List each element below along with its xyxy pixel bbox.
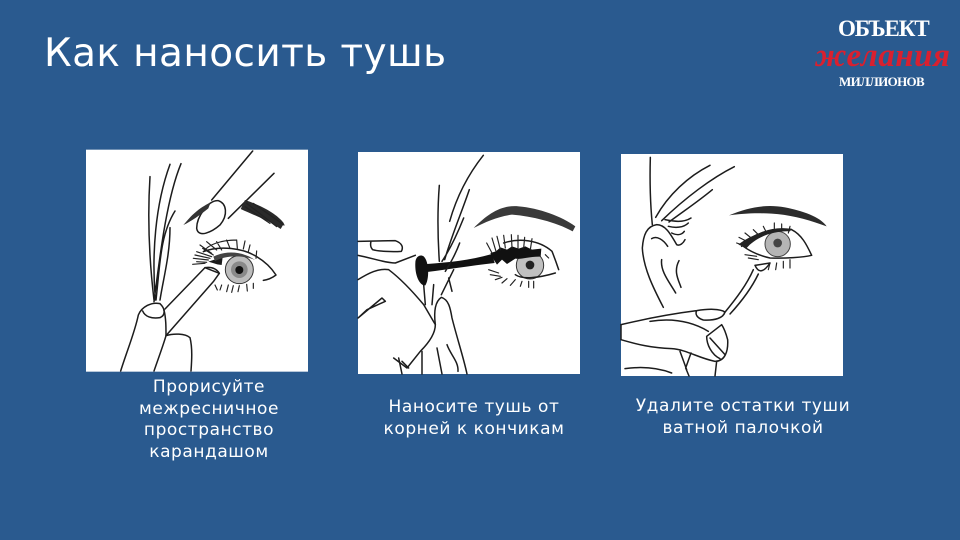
panel: drawing on the lash line with pencil xyxy=(86,150,308,372)
icon: eye xyxy=(193,240,276,292)
icon: eyebrow xyxy=(474,206,575,231)
logo: ОБЪЕКТ xyxy=(838,16,929,41)
caption: step 3: Удалите остатки туши xyxy=(636,396,850,416)
panel: removing residue with cotton swab xyxy=(621,154,843,376)
caption: step 1: Прорисуйте xyxy=(153,377,265,397)
caption: step 1 xyxy=(139,377,279,462)
logo: желания xyxy=(815,38,950,74)
icon: ear and hair xyxy=(642,157,734,307)
icon: eye xyxy=(737,223,812,270)
icon: eye with mascara xyxy=(487,235,559,288)
logo xyxy=(815,16,950,89)
title: Как наносить тушь xyxy=(44,31,446,76)
icon: finger over eyebrow xyxy=(183,151,284,234)
caption: step 1: межресничное xyxy=(139,398,279,418)
icon: eyebrow xyxy=(729,206,827,226)
caption: step 2: Наносите тушь от xyxy=(389,397,559,417)
caption: step 2: корней к кончикам xyxy=(384,418,564,438)
caption: step 3 xyxy=(636,396,850,438)
icon: hand with pencil xyxy=(121,164,223,371)
caption: step 1: пространство xyxy=(144,420,274,440)
caption: step 1: карандашом xyxy=(149,442,269,462)
logo: МИЛЛИОНОВ xyxy=(839,74,924,89)
caption: step 3: ватной палочкой xyxy=(662,418,824,438)
panel: applying mascara xyxy=(358,152,580,374)
icon: hand with cotton swab xyxy=(621,263,770,376)
caption: step 2 xyxy=(384,397,564,438)
icon: hand with mascara wand xyxy=(358,155,495,374)
